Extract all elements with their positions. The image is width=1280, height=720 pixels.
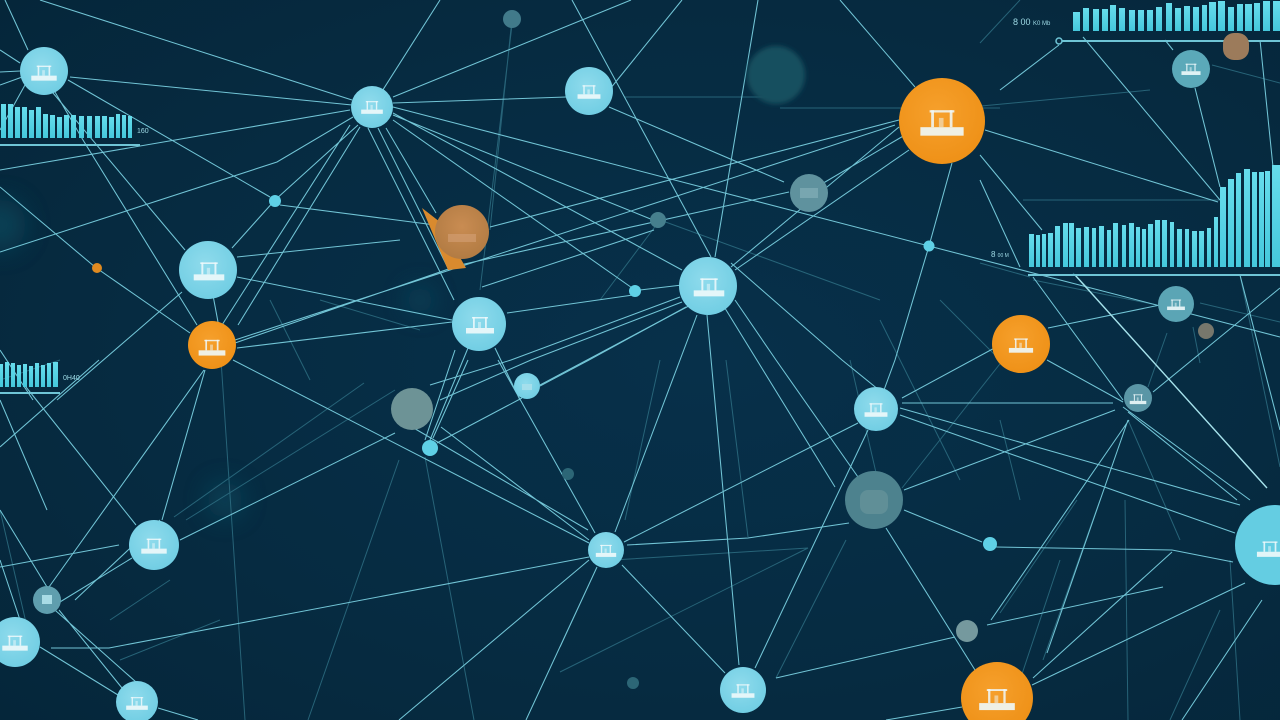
node: grey bottom right: [956, 620, 978, 642]
middle right label: 8 00 M: [991, 250, 1009, 259]
node: dim large lower centre: [845, 471, 903, 529]
node: left cyan: [179, 241, 237, 299]
node: mid right cyan: [854, 387, 898, 431]
soft background glows: [0, 199, 434, 518]
bright long link: [1075, 275, 1267, 488]
node: centre cyan: [679, 257, 737, 315]
node: dim lower left: [33, 586, 61, 614]
bar chart: upper left: [0, 104, 149, 146]
node: top left: [20, 47, 68, 95]
node: lower left: [129, 520, 179, 570]
node: brown with wedge: [422, 205, 489, 270]
node: right orange: [992, 315, 1050, 373]
node: grey centre left: [391, 388, 433, 430]
bar chart: top right: [1013, 1, 1280, 44]
middle right axis: [1028, 274, 1280, 276]
node: large cyan right edge: [1235, 505, 1280, 585]
ghost nodes: [503, 10, 1214, 689]
top right label: 8 00 K0 Mb: [1013, 17, 1051, 27]
node: dim grey centre: [790, 174, 828, 212]
node: dim mid right: [1124, 384, 1152, 412]
middle right bars: [1029, 165, 1280, 267]
node: bottom orange: [961, 662, 1033, 720]
node: upper centre left: [351, 86, 393, 128]
node: upper centre: [565, 67, 613, 115]
upper left label: 160: [137, 128, 149, 135]
small junction dots: [269, 195, 997, 551]
node: left orange: [188, 321, 236, 369]
top right bars: [1073, 1, 1280, 31]
bar chart: middle right: [991, 165, 1280, 276]
node: small cyan: [514, 373, 540, 399]
node: dim right: [1158, 286, 1194, 322]
node: dim top right: [1172, 50, 1210, 88]
node: lower centre: [588, 532, 624, 568]
node: bottom left edge: [0, 617, 40, 667]
node: bottom left: [116, 681, 158, 720]
lower left label: 0H40: [63, 375, 80, 382]
node: brown top right: [1223, 33, 1249, 60]
top right axis: [1056, 38, 1280, 44]
node: large orange top: [899, 78, 985, 164]
node: centre left cyan: [452, 297, 506, 351]
node: bottom centre: [720, 667, 766, 713]
upper left bars: [1, 104, 132, 138]
bar chart: lower left: [0, 362, 80, 394]
upper left axis: [0, 144, 140, 146]
lower left bars: [0, 362, 58, 387]
small orange dot: [92, 263, 102, 273]
lower left axis: [0, 392, 60, 394]
